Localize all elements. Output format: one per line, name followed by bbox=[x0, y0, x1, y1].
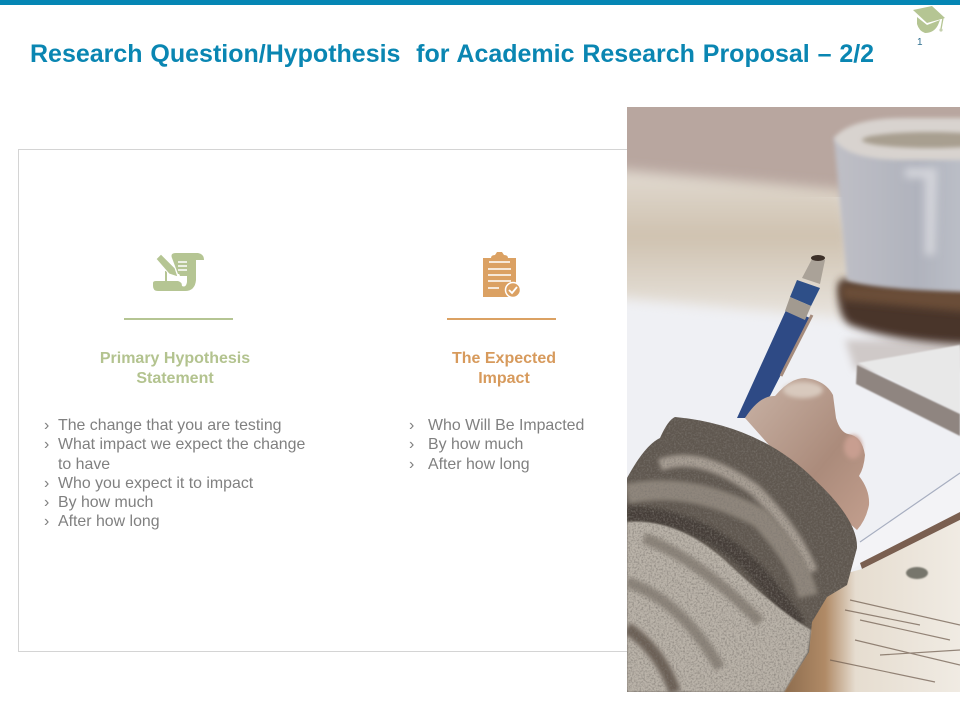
panel: primary hypothesis: › bbox=[44, 494, 49, 510]
list: expected impact points: By how much bbox=[428, 436, 523, 453]
knit sweater sleeve bbox=[627, 417, 857, 692]
list: expected impact points bbox=[409, 417, 584, 472]
heading: the expected impact: Impact bbox=[478, 370, 530, 386]
hand bbox=[745, 378, 869, 530]
list: primary hypothesis points: What impact we expect the change bbox=[58, 436, 305, 453]
panel: primary hypothesis: › bbox=[44, 417, 49, 434]
heading: the expected impact bbox=[452, 350, 556, 386]
panel: expected impact bbox=[409, 252, 584, 472]
panel: expected impact: › bbox=[409, 436, 414, 453]
pen bbox=[737, 255, 825, 418]
paper sheets bbox=[850, 473, 960, 570]
panel: primary hypothesis: › bbox=[44, 513, 49, 530]
list: primary hypothesis points: The change that you are testing bbox=[58, 417, 282, 434]
panel: primary hypothesis bbox=[44, 253, 305, 530]
panel: primary hypothesis: › bbox=[44, 436, 49, 453]
top bar bbox=[0, 0, 960, 5]
panel: content frame bbox=[18, 149, 660, 652]
photo background bbox=[600, 107, 960, 692]
list: primary hypothesis points: to have bbox=[58, 456, 110, 472]
icon: graduation cap bbox=[913, 6, 945, 33]
panel: expected impact: › bbox=[409, 417, 414, 434]
list: expected impact points: Who Will Be Impacted bbox=[428, 417, 584, 434]
icon: scroll and pencil bbox=[153, 253, 204, 291]
tablet bbox=[856, 345, 960, 436]
wood table bbox=[780, 520, 960, 692]
heading: primary hypothesis statement: Primary Hypothesis bbox=[100, 350, 250, 367]
list: primary hypothesis points: After how long bbox=[58, 513, 160, 530]
panel: expected impact: › bbox=[409, 456, 414, 472]
heading: the expected impact: The Expected bbox=[452, 350, 556, 367]
list: primary hypothesis points: By how much bbox=[58, 494, 153, 510]
list: expected impact points: After how long bbox=[428, 456, 530, 472]
divider: orange bbox=[447, 318, 556, 320]
photo: hand writing with a pen bbox=[627, 107, 960, 692]
panel: primary hypothesis: › bbox=[44, 474, 49, 492]
mug and coaster bbox=[834, 118, 960, 345]
heading: primary hypothesis statement: Statement bbox=[136, 370, 214, 386]
divider: green bbox=[124, 318, 233, 320]
list: primary hypothesis points: Who you expect it to impact bbox=[58, 474, 253, 492]
icon: clipboard with check bbox=[483, 252, 520, 297]
title: Research Question/Hypothesis for Academic Research Proposal – 2/2 bbox=[30, 40, 874, 68]
heading: primary hypothesis statement bbox=[100, 350, 250, 386]
list: primary hypothesis points bbox=[44, 417, 305, 530]
page number: 1 bbox=[917, 37, 923, 48]
